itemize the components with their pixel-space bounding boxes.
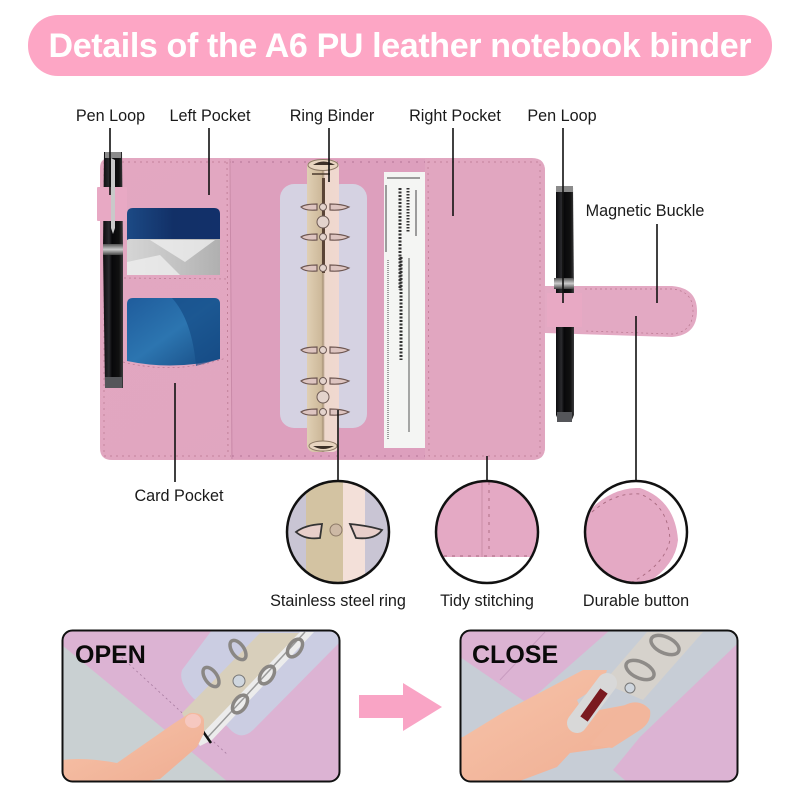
detail circle: tidy stitching — [434, 480, 540, 584]
left pen — [97, 152, 127, 388]
pink leather — [62, 630, 340, 782]
left pocket stitching — [227, 162, 228, 456]
close label: CLOSE — [472, 641, 558, 669]
detail circle: stainless steel ring — [285, 480, 391, 584]
paper — [181, 630, 342, 735]
label: left pocket: Left Pocket — [170, 107, 251, 125]
caption: tidy stitching: Tidy stitching — [440, 592, 534, 610]
caption: stainless steel ring: Stainless steel ring — [270, 592, 406, 610]
rings — [624, 634, 681, 682]
panel: open — [62, 630, 342, 782]
label: ring binder: Ring Binder — [290, 107, 375, 125]
binder strip — [603, 632, 703, 700]
inner spine panel — [231, 159, 425, 459]
filler paper — [280, 184, 367, 428]
label: card pocket: Card Pocket — [134, 487, 224, 505]
credit cards in left pocket — [123, 208, 228, 368]
large blue card — [127, 298, 220, 366]
label: magnetic buckle: Magnetic Buckle — [586, 202, 704, 220]
magnetic buckle strap — [545, 286, 697, 337]
hand — [62, 713, 204, 782]
pink leather lower — [613, 643, 738, 782]
thumb — [609, 702, 650, 748]
label: right pocket: Right Pocket — [409, 107, 501, 125]
right pen — [547, 186, 582, 422]
caption: durable button: Durable button — [583, 592, 689, 610]
arrow — [359, 683, 442, 731]
hand — [462, 670, 625, 780]
right pen loop — [547, 293, 582, 327]
barrel — [577, 683, 607, 723]
right pocket — [425, 159, 545, 460]
rings — [301, 204, 349, 415]
open label: OPEN — [75, 641, 146, 669]
label: pen loop right: Pen Loop — [527, 107, 597, 125]
rings — [200, 636, 306, 716]
ring binder mechanism — [301, 160, 349, 452]
silver card — [127, 239, 220, 275]
pen loop strap — [97, 187, 127, 221]
label: pen loop left: Pen Loop — [76, 107, 145, 125]
open binder body — [100, 158, 545, 460]
detail circle: durable button — [585, 481, 687, 590]
card pocket strip — [124, 278, 228, 279]
leader lines — [110, 128, 657, 482]
id card window — [384, 172, 425, 448]
title banner: Details of the A6 PU leather notebook binder — [48, 27, 752, 65]
binder strip — [182, 633, 299, 731]
pink leather upper — [460, 630, 610, 703]
panel: close — [460, 630, 738, 782]
title banner — [28, 15, 772, 76]
blue card — [127, 208, 220, 240]
